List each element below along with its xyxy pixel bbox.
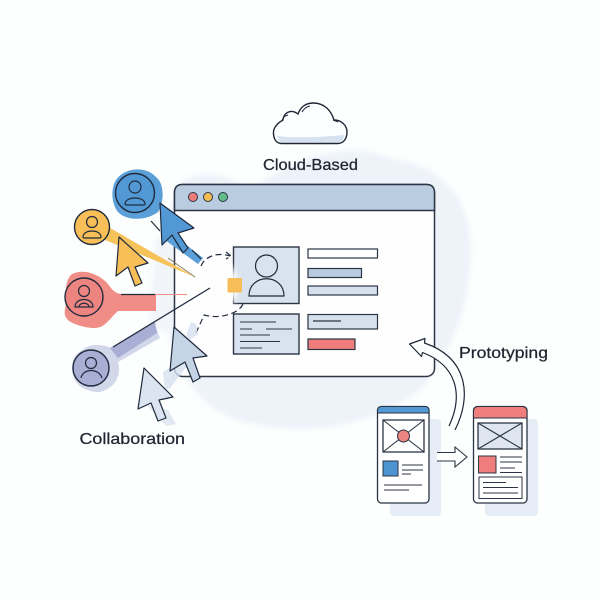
text card — [234, 314, 299, 354]
node — [228, 278, 242, 292]
panel: prototyping — [378, 338, 538, 516]
cursor: grey back — [138, 368, 173, 421]
profile photo — [234, 247, 299, 304]
form rows — [308, 249, 378, 350]
cursor: blue — [160, 203, 194, 253]
connection hub — [190, 252, 243, 333]
cursor trails — [163, 322, 198, 390]
user: red — [65, 272, 187, 328]
panel: collaboration — [65, 169, 210, 426]
cursor: grey front — [170, 327, 207, 382]
phone: second wireframe — [474, 406, 527, 503]
label: Collaboration: Collaboration — [80, 431, 185, 448]
phone: first wireframe — [378, 406, 429, 503]
dashed connectors — [196, 252, 243, 333]
user: purple — [72, 288, 210, 392]
cloud icon — [273, 103, 347, 144]
label: Cloud-Based: Cloud-Based — [263, 157, 358, 174]
cursor: yellow — [116, 237, 148, 286]
phone shadows — [390, 419, 538, 516]
panel: browser window — [174, 184, 434, 376]
background wash — [150, 151, 471, 429]
title bar — [174, 184, 434, 210]
user: blue — [112, 169, 203, 264]
user: yellow — [74, 210, 195, 286]
label: Prototyping: Prototyping — [459, 345, 548, 362]
arrow: between phones — [437, 447, 467, 467]
window controls — [188, 192, 228, 202]
arrow: curved to window — [410, 338, 464, 430]
